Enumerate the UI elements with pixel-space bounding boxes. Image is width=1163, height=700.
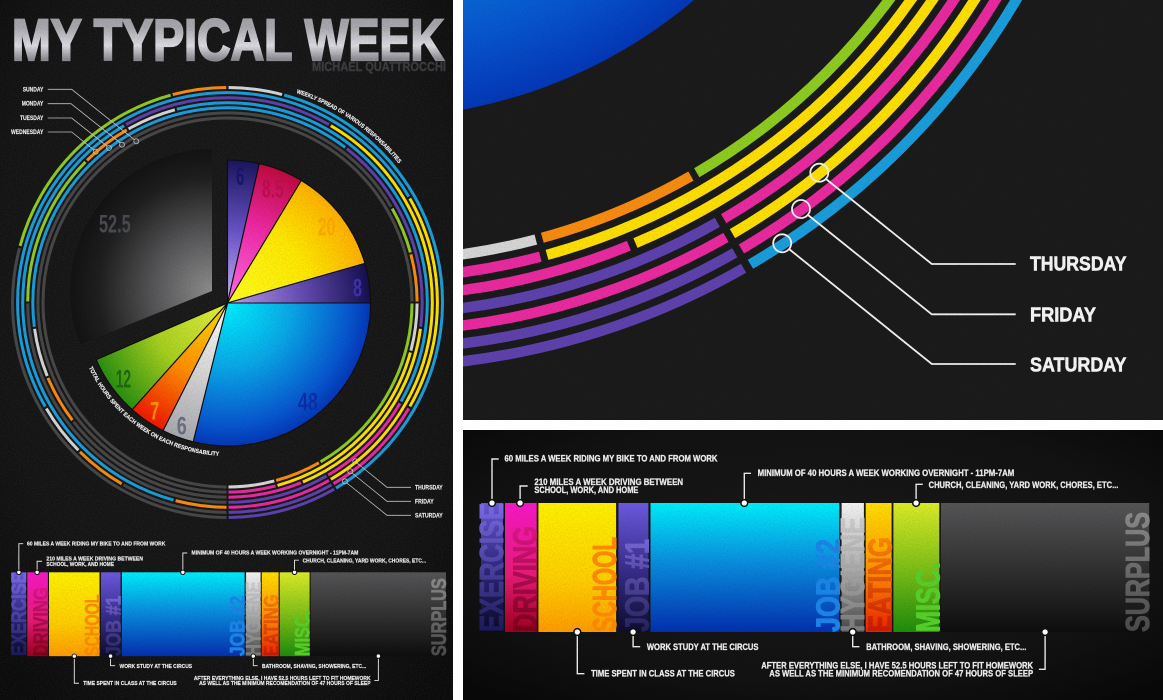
bar: school: SCHOOL bbox=[586, 537, 623, 632]
bar: surplus bbox=[941, 503, 1156, 632]
bar annotations: CHURCH, CLEANING, YARD WORK, CHORES, ETC... bbox=[929, 480, 1118, 490]
bar: job 1: JOB #1 bbox=[618, 539, 655, 632]
bar annotations bbox=[17, 541, 426, 687]
slice: eating 7 bbox=[132, 303, 228, 431]
zoomed day callouts: SATURDAY bbox=[1030, 353, 1127, 376]
bar annotations bbox=[489, 454, 1118, 679]
slice: job 2, 48 bbox=[193, 303, 370, 446]
bar annotations: BATHROOM, SHAVING, SHOWERING, ETC... bbox=[262, 664, 367, 670]
slice: school 20 bbox=[228, 180, 365, 303]
day labels: Thursday to Saturday: SATURDAY bbox=[415, 514, 443, 520]
bar annotations: TIME SPENT IN CLASS AT THE CIRCUS bbox=[591, 669, 735, 679]
bar: school: SCHOOL bbox=[81, 594, 105, 656]
bar: school bbox=[538, 503, 623, 632]
bar: surplus: SURPLUS bbox=[1119, 512, 1156, 632]
curved pie caption: TOTAL HOURS SPENT EACH WEEK ON EACH RESPONSABILITY bbox=[89, 366, 220, 456]
day labels: Sunday to Wednesday: TUESDAY bbox=[20, 116, 43, 122]
bar: misc bbox=[893, 503, 946, 632]
bar annotations: 210 MILES A WEEK DRIVING BETWEEN bbox=[46, 557, 143, 563]
pie values: 12 bbox=[116, 365, 131, 393]
stacked bar overview bbox=[7, 541, 451, 687]
bar: job 2 bbox=[650, 503, 846, 632]
pie values: 6 bbox=[236, 163, 244, 191]
bar annotations: BATHROOM, SHAVING, SHOWERING, ETC... bbox=[866, 642, 1026, 652]
bar: driving: DRIVING bbox=[507, 526, 544, 632]
bar: eating: EATING bbox=[260, 594, 284, 656]
day labels: Sunday to Wednesday: SUNDAY bbox=[23, 87, 43, 93]
bar: misc bbox=[280, 572, 315, 656]
bar annotations: 60 MILES A WEEK RIDING MY BIKE TO AND FROM WORK bbox=[27, 541, 166, 547]
slice: driving 8.5 bbox=[228, 164, 301, 303]
day labels: Thursday to Saturday: THURSDAY bbox=[415, 485, 443, 491]
bar: driving: DRIVING bbox=[29, 587, 53, 656]
pie values: 7 bbox=[150, 397, 159, 425]
bar: job 2 bbox=[122, 572, 250, 656]
pie values: 8 bbox=[353, 275, 362, 303]
panel: zoomed ring detail bbox=[463, 0, 1163, 420]
pie values bbox=[99, 163, 362, 440]
curved ring caption: WEEKLY SPREAD OF VARIOUS RESPONSABILITIES bbox=[297, 89, 402, 164]
day labels: Sunday to Wednesday: MONDAY bbox=[22, 102, 43, 108]
bar: school bbox=[49, 572, 105, 656]
title: MY TYPICAL WEEK bbox=[12, 8, 444, 73]
pie values: 52.5 bbox=[99, 211, 131, 239]
slice: job 1, 8 bbox=[228, 263, 370, 303]
bar annotations: TIME SPENT IN CLASS AT THE CIRCUS bbox=[83, 681, 177, 687]
bar: job 2: JOB #2 bbox=[226, 596, 250, 656]
bar annotations: SCHOOL, WORK, AND HOME bbox=[534, 485, 639, 495]
zoomed day callouts bbox=[773, 164, 1127, 376]
bar annotations: CHURCH, CLEANING, YARD WORK, CHORES, ETC... bbox=[303, 559, 426, 565]
slice: surplus 52.5 bbox=[70, 149, 212, 344]
zoomed day callouts: THURSDAY bbox=[1030, 253, 1127, 276]
bar: eating: EATING bbox=[862, 537, 899, 632]
bar annotations: AFTER EVERYTHING ELSE, I HAVE 52.5 HOURS LEFT TO FIT HOMEWORK bbox=[761, 661, 1034, 671]
day labels: Thursday to Saturday: FRIDAY bbox=[415, 499, 434, 505]
bar annotations: AS WELL AS THE MINIMUM RECOMENDATION OF 47 HOURS OF SLEEP bbox=[199, 681, 371, 687]
bar: misc: MISC. bbox=[909, 562, 946, 632]
bar annotations: 210 MILES A WEEK DRIVING BETWEEN bbox=[534, 477, 683, 487]
pie values: 48 bbox=[298, 389, 318, 417]
slice: exercise 6 bbox=[228, 160, 259, 303]
bar annotations: AFTER EVERYTHING ELSE, I HAVE 52.5 HOURS LEFT TO FIT HOMEWORK bbox=[194, 676, 371, 682]
pie values: 8.5 bbox=[262, 175, 284, 203]
author name: MICHAEL QUATTROCCHI bbox=[312, 60, 446, 74]
pie chart: weekly hours bbox=[70, 149, 370, 446]
bar annotations: WORK STUDY AT THE CIRCUS bbox=[120, 664, 192, 670]
pie values: 6 bbox=[177, 412, 187, 440]
pie values: 20 bbox=[318, 214, 335, 242]
weekly spread rings bbox=[12, 88, 442, 518]
bar: surplus bbox=[311, 572, 451, 656]
panel: full poster overview bbox=[0, 0, 453, 700]
bar annotations: WORK STUDY AT THE CIRCUS bbox=[647, 642, 759, 652]
day labels: Thursday to Saturday bbox=[342, 459, 443, 520]
bar: hygiene: HYGIENE bbox=[242, 581, 266, 656]
bar: misc: MISC. bbox=[291, 611, 315, 656]
bar: exercise: EXERCISE bbox=[473, 503, 510, 632]
bar annotations: SCHOOL, WORK, AND HOME bbox=[46, 562, 114, 568]
bar: job 2: JOB #2 bbox=[809, 539, 846, 632]
bar: surplus: SURPLUS bbox=[427, 578, 451, 656]
bar: exercise: EXERCISE bbox=[7, 572, 31, 656]
bar: job 1: JOB #1 bbox=[101, 596, 125, 656]
zoomed day callouts: FRIDAY bbox=[1030, 303, 1096, 326]
day labels: Sunday to Wednesday bbox=[11, 87, 139, 154]
zoomed rings and pie edge bbox=[463, 0, 1022, 367]
slice: misc 12 bbox=[96, 303, 228, 410]
bar annotations: MINIMUM OF 40 HOURS A WEEK WORKING OVERNIGHT - 11PM-7AM bbox=[758, 468, 1014, 478]
bar: hygiene: HYGIENE bbox=[834, 517, 871, 632]
bar annotations: AS WELL AS THE MINIMUM RECOMENDATION OF 47 HOURS OF SLEEP bbox=[769, 669, 1033, 679]
bar annotations: 60 MILES A WEEK RIDING MY BIKE TO AND FROM WORK bbox=[504, 454, 718, 464]
panel: zoomed stacked bar bbox=[463, 430, 1163, 700]
bar annotations: MINIMUM OF 40 HOURS A WEEK WORKING OVERNIGHT - 11PM-7AM bbox=[191, 551, 359, 557]
day labels: Sunday to Wednesday: WEDNESDAY bbox=[11, 130, 43, 136]
slice: hygiene 6 bbox=[163, 303, 228, 442]
